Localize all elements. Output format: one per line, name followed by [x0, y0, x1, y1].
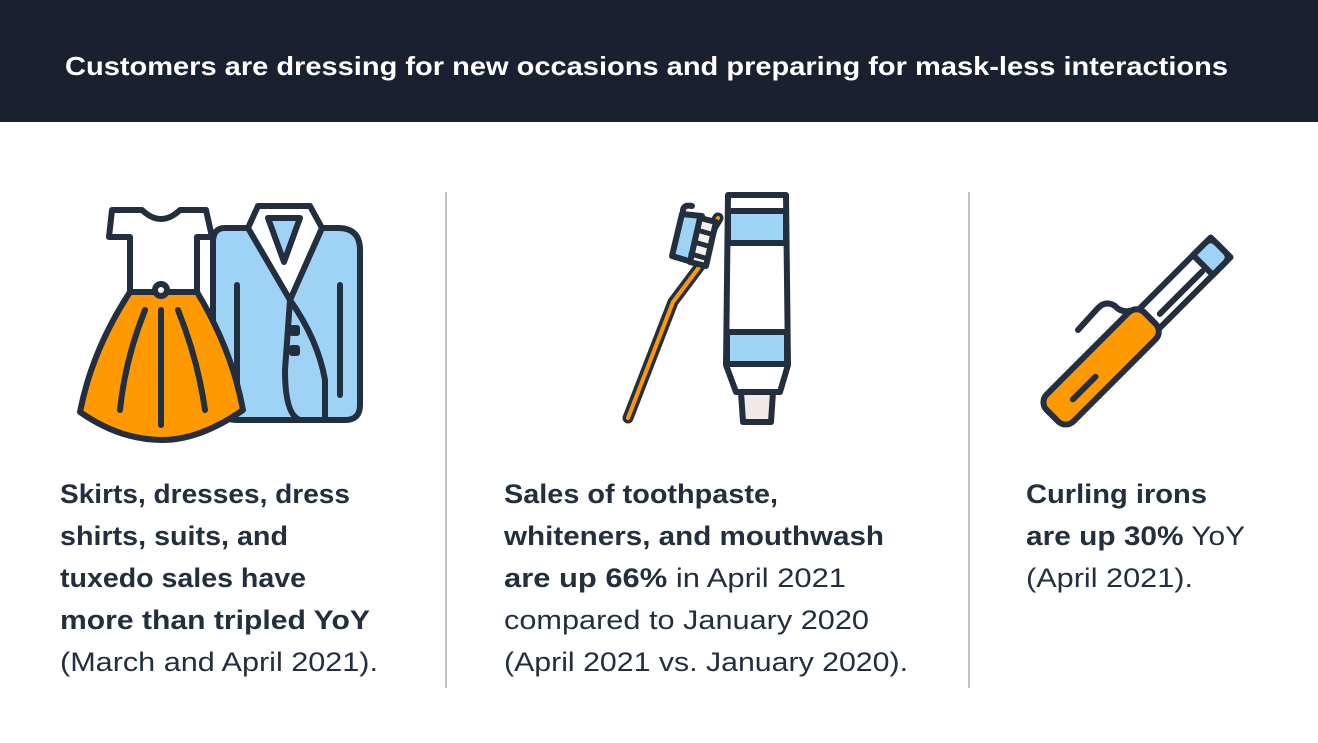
- text: column 2: Sales of toothpaste,: [504, 479, 778, 509]
- text: column 1: Skirts, dresses, dress: [60, 479, 350, 509]
- text: column 2: are up 66% in April 2021: [504, 563, 846, 593]
- text: column 1: (March and April 2021).: [60, 647, 378, 677]
- text: column 1: more than tripled YoY: [60, 605, 370, 635]
- text: column 2: whiteners, and mouthwash: [503, 521, 884, 551]
- text: column 3: [1026, 479, 1245, 593]
- text: column 2: [503, 479, 908, 677]
- text: column 1: [60, 479, 378, 677]
- text: column 1: shirts, suits, and: [60, 521, 288, 551]
- text: column 3: are up 30% YoY: [1026, 521, 1245, 551]
- text: column 1: tuxedo sales have: [60, 563, 306, 593]
- header bar: [0, 0, 1318, 122]
- icon: dress and suit: [80, 206, 360, 440]
- text: column 2: (April 2021 vs. January 2020).: [504, 647, 908, 677]
- icon: curling iron: [1039, 234, 1234, 429]
- text: column 2: compared to January 2020: [504, 605, 869, 635]
- text: column 3: Curling irons: [1026, 479, 1207, 509]
- text: column 3: (April 2021).: [1026, 563, 1193, 593]
- title: Customers are dressing for new occasions and preparing for mask-less interactions: [65, 51, 1228, 81]
- icon: toothbrush and toothpaste: [628, 195, 788, 422]
